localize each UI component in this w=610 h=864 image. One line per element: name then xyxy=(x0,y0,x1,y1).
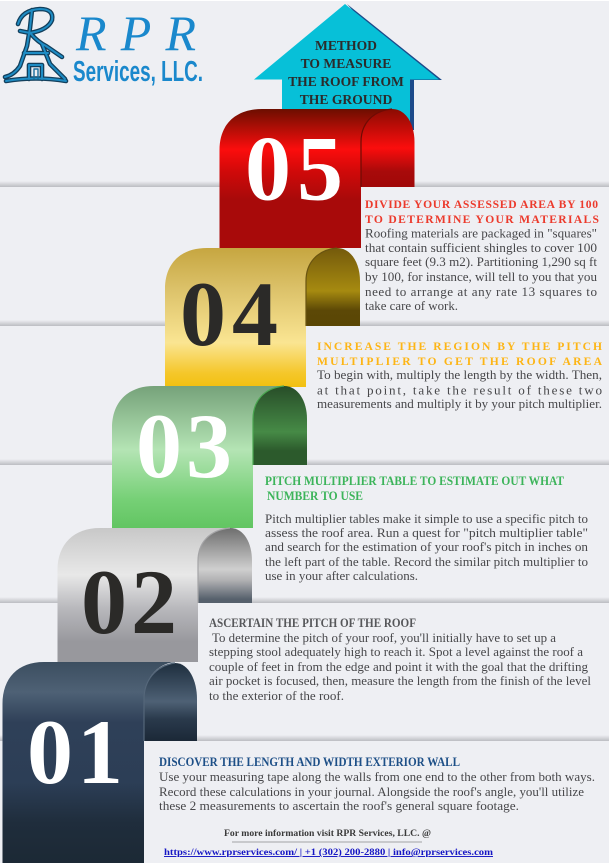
title text: METHOD xyxy=(315,38,377,53)
step 1 heading: DISCOVER THE LENGTH AND WIDTH EXTERIOR WALL xyxy=(159,755,460,769)
step 5 heading xyxy=(365,198,599,226)
step 4 text xyxy=(317,340,603,411)
step 5 body: need to arrange at any rate 13 squares to xyxy=(365,284,597,299)
step 5 body: by 100, for instance, will tell to you that you xyxy=(365,269,597,284)
step 5 heading: TO DETERMINE YOUR MATERIALS xyxy=(365,213,599,226)
number 01: 01 xyxy=(27,701,123,803)
step 4 body: at that point, take the result of these two xyxy=(317,382,602,398)
number 05: 05 xyxy=(245,118,343,220)
step 2 body xyxy=(209,630,591,703)
step 5 heading: DIVIDE YOUR ASSESSED AREA BY 100 xyxy=(365,198,598,211)
footer contact xyxy=(164,829,493,858)
scroll 02 xyxy=(58,528,252,662)
step 1 text xyxy=(159,755,595,813)
step 3 body: the left part of the table. Record the similar pitch multiplier to xyxy=(265,554,588,569)
step 3 heading: NUMBER TO USE xyxy=(267,489,363,503)
step 2 body: air pocket is focused, then, measure the length from the finish of the level xyxy=(209,673,591,688)
step 4 body: measurements and multiply it by your pitch multiplier. xyxy=(317,396,602,411)
step 3 heading: PITCH MULTIPLIER TABLE TO ESTIMATE OUT WHAT xyxy=(265,474,565,488)
scroll 05 xyxy=(220,109,414,248)
number 03: 03 xyxy=(136,395,232,497)
step 1 body xyxy=(159,769,595,813)
step 3 body: assess the roof area. Run a quest for "pitch multiplier table" xyxy=(265,525,588,540)
number 04: 04 xyxy=(180,263,278,365)
title text xyxy=(288,38,404,107)
title text: THE GROUND xyxy=(300,92,392,107)
step 3 body xyxy=(265,511,588,583)
step 1 body: Use your measuring tape along the walls from one end to the other from both ways. xyxy=(159,769,595,784)
brand name RPR: RPR xyxy=(75,5,196,61)
step 4 body: To begin with, multiply the length by the width. Then, xyxy=(317,367,602,382)
number 02: 02 xyxy=(81,551,177,653)
arrow shadow edge xyxy=(347,4,442,130)
step 2 text xyxy=(209,616,591,703)
step 2 heading: ASCERTAIN THE PITCH OF THE ROOF xyxy=(209,616,416,630)
step 4 body xyxy=(317,367,602,411)
footer prompt: For more information visit RPR Services, LLC. @ xyxy=(224,829,431,839)
house arrow title xyxy=(254,4,442,130)
title text: THE ROOF FROM xyxy=(288,74,404,89)
title text: TO MEASURE xyxy=(301,56,391,71)
step 2 body: stepping stool adequately high to reach it. Spot a level against the roof a xyxy=(209,644,583,659)
arrow body xyxy=(254,4,439,125)
step 5 body: take care of work. xyxy=(365,298,458,313)
scroll 03 xyxy=(112,386,307,528)
step 5 body: square feet (9.3 m2). Partitioning 1,290 sq ft xyxy=(365,254,597,269)
step 3 body: and search for the estimation of your roof's pitch in inches on xyxy=(265,539,588,554)
step 5 text xyxy=(365,198,599,313)
step 3 body: Pitch multiplier tables make it simple to use a specific pitch to xyxy=(265,511,588,526)
step 3 body: use in your after calculations. xyxy=(265,568,418,583)
step 4 heading: MULTIPLIER TO GET THE ROOF AREA xyxy=(317,355,603,368)
step 1 body: Record these calculations in your journal. Alongside the roof's angle, you'll utilize xyxy=(159,784,584,799)
brand name Services, LLC.: Services, LLC. xyxy=(73,56,203,88)
step 3 heading xyxy=(265,474,565,503)
step 2 body: To determine the pitch of your roof, you'll initially have to set up a xyxy=(212,630,556,645)
step 4 heading xyxy=(317,340,603,368)
step 2 body: couple of feet in from the edge and point it with the goal that the drifting xyxy=(209,659,588,674)
step 4 heading: INCREASE THE REGION BY THE PITCH xyxy=(317,340,602,353)
step 2 body: to the exterior of the roof. xyxy=(209,688,344,703)
footer links: https://www.rprservices.com/ | +1 (302) 200-2880 | info@rprservices.com xyxy=(164,847,493,858)
step 1 body: these 2 measurements to ascertain the roof's general square footage. xyxy=(159,798,519,813)
step 3 text xyxy=(265,474,588,583)
scroll 01 xyxy=(2,662,197,863)
step 5 body: Roofing materials are packaged in "squares" xyxy=(365,226,597,240)
icon: house with R monogram xyxy=(5,9,66,81)
step 5 body xyxy=(365,226,597,313)
scroll 04 xyxy=(165,248,360,387)
logo: RPR Services, LLC. xyxy=(5,5,203,88)
step 5 body: that contain sufficient shingles to cover 100 xyxy=(365,240,597,255)
